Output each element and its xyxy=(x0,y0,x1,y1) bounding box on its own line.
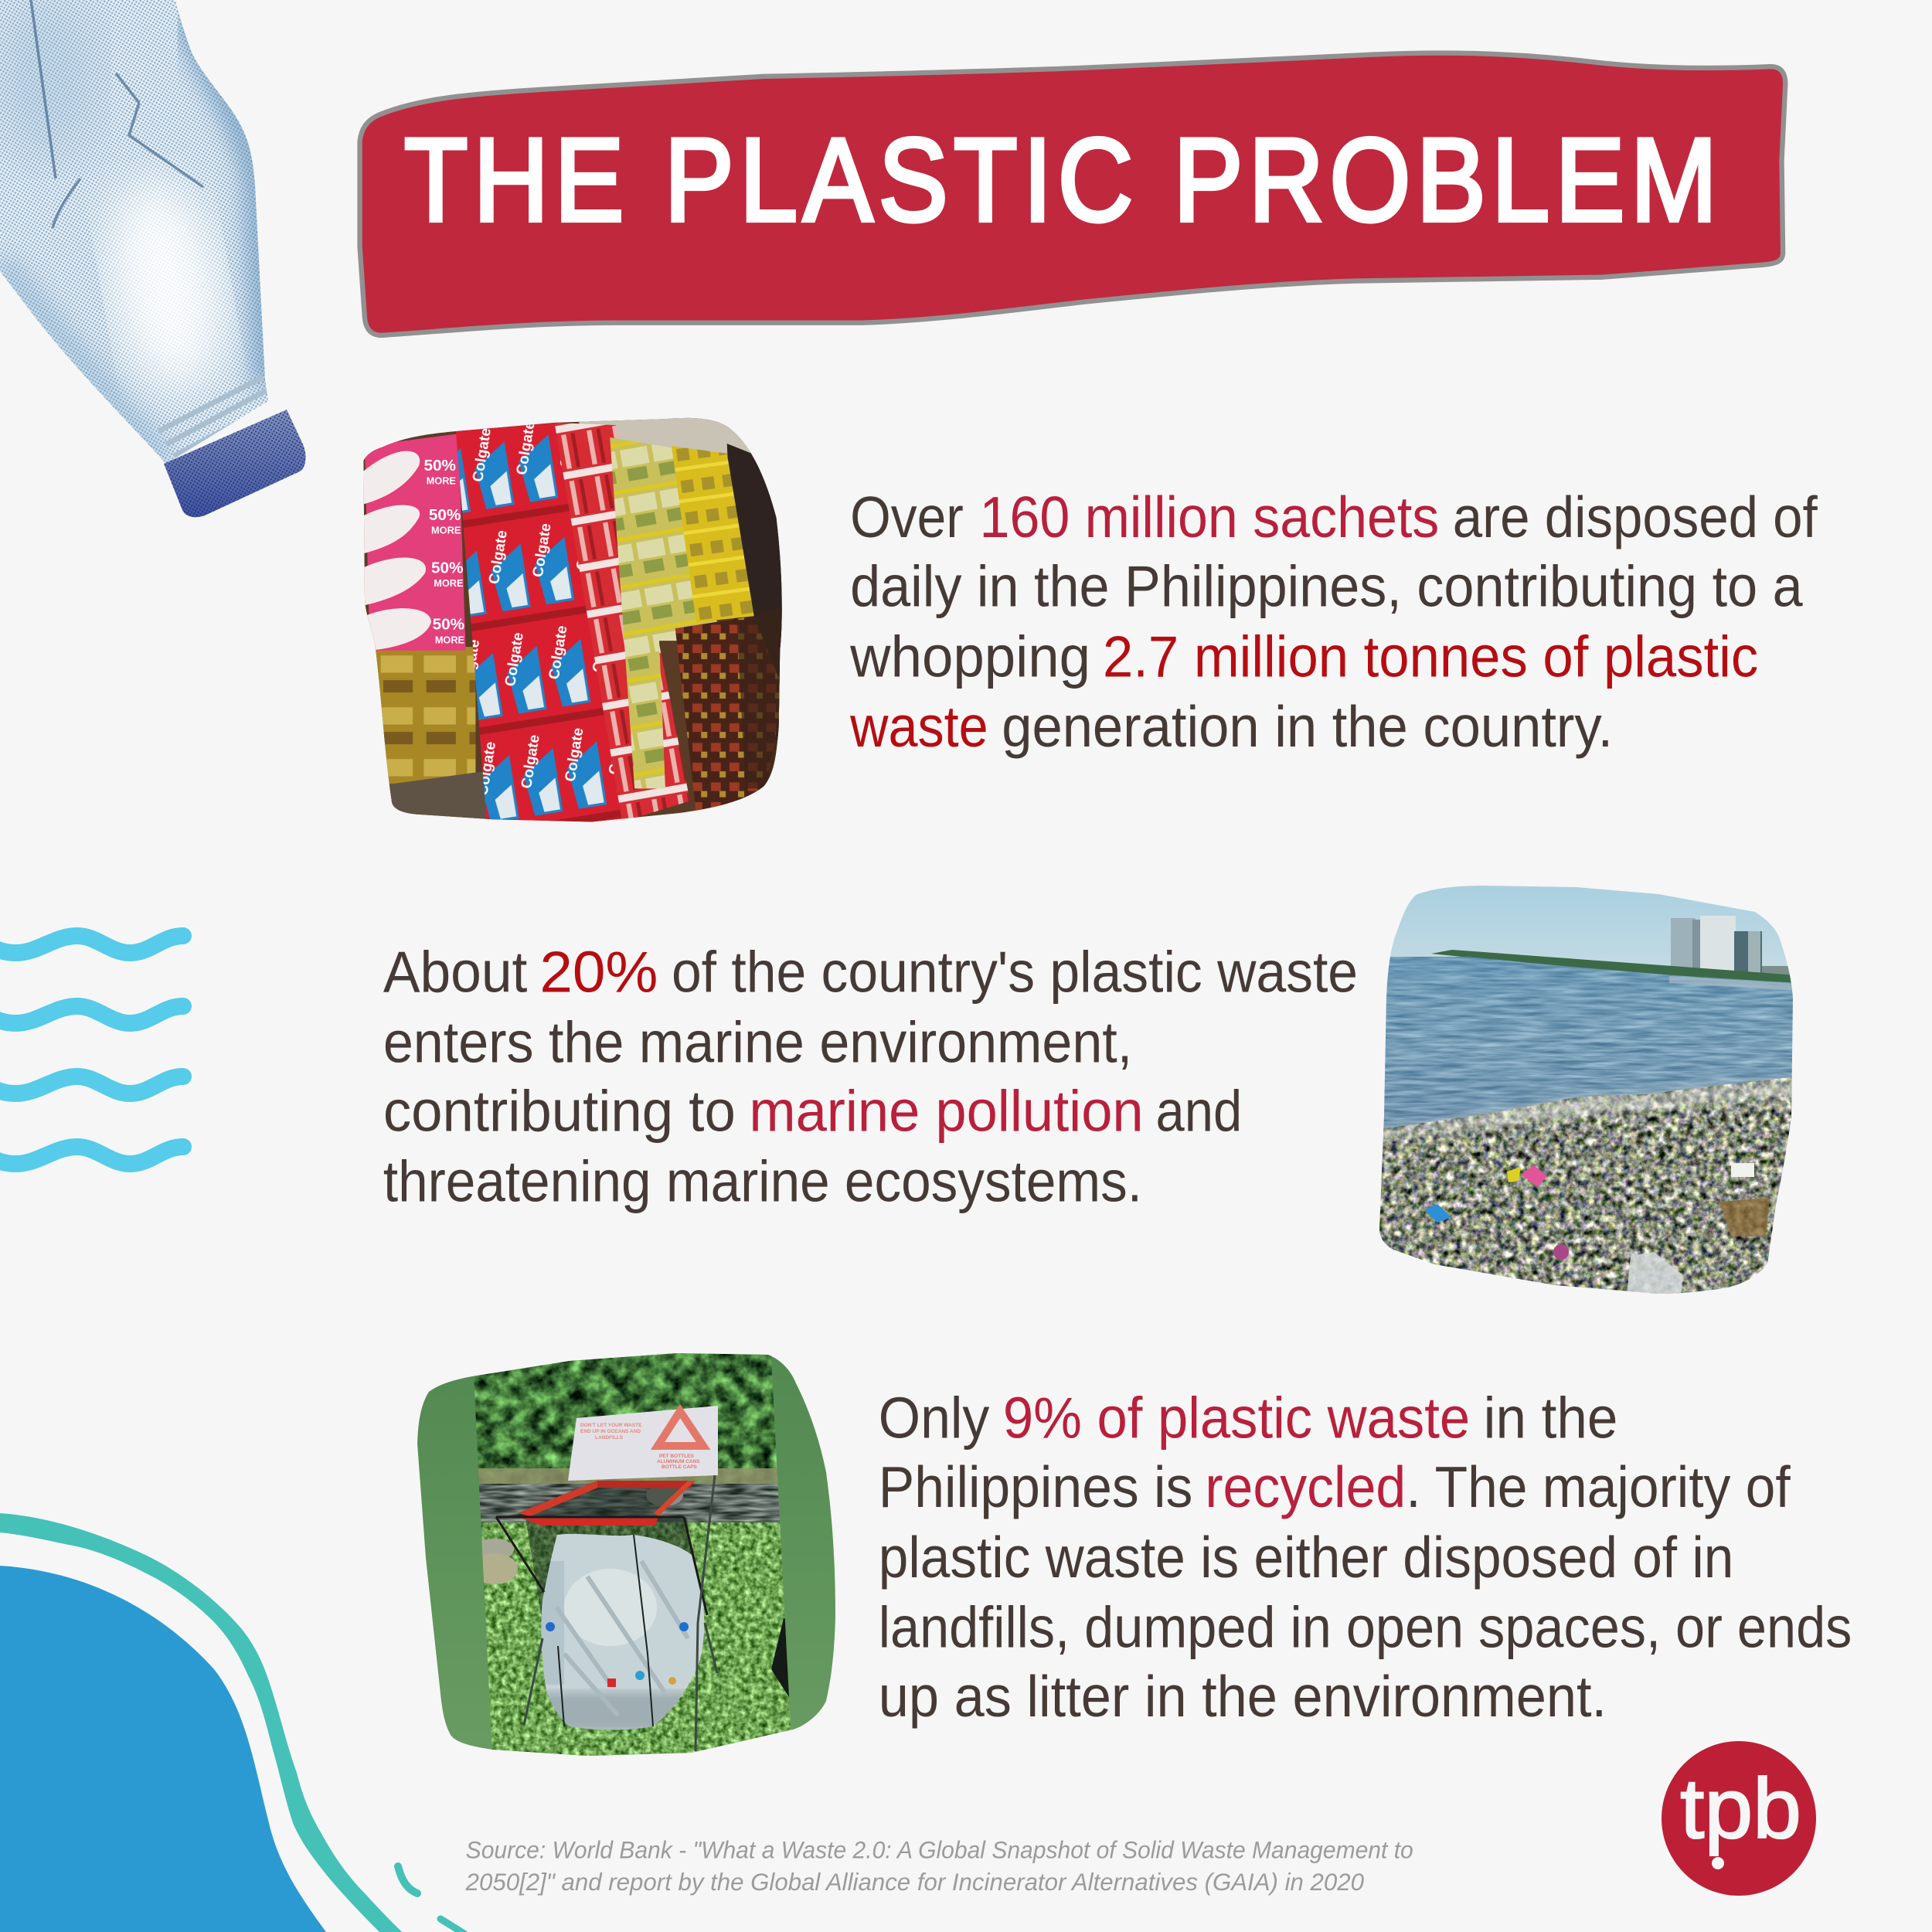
title text: THE PLASTIC PROBLEM xyxy=(404,113,1717,246)
photo: sachets at a store: 50% xyxy=(431,559,464,577)
photo: sachets at a store xyxy=(357,413,788,825)
text: recycling: 9% of plastic waste xyxy=(1003,1386,1470,1451)
litter colour accents xyxy=(1424,1163,1770,1294)
sign board: END UP IN OCEANS AND xyxy=(580,1429,641,1434)
logo: tpb xyxy=(1662,1741,1816,1896)
photo: sachets at a store: MORE xyxy=(431,524,461,536)
text: sachets: daily in the Philippines, contributing to a xyxy=(850,553,1803,618)
text: recycling: recycled xyxy=(1205,1454,1406,1519)
text: sachets: are disposed of xyxy=(1453,485,1818,549)
text: recycling xyxy=(879,1386,1852,1729)
text: recycling: landfills, dumped in open spaces, or ends xyxy=(879,1595,1852,1660)
sign board xyxy=(568,1406,718,1481)
text: recycling: in the xyxy=(1484,1386,1617,1451)
text: marine environment: contributing to xyxy=(383,1079,736,1144)
text: marine environment: of the country's plastic waste xyxy=(672,939,1358,1004)
text: marine environment: 20% xyxy=(539,939,658,1004)
sign board: PET BOTTLES xyxy=(659,1454,694,1459)
text: marine environment: About xyxy=(383,939,528,1004)
illustration: crushed plastic bottle xyxy=(0,0,305,517)
photo: sachets at a store: MORE xyxy=(435,634,464,645)
decoration: blue wave corner xyxy=(0,1566,326,1932)
photo: sachets at a store: MORE xyxy=(434,577,463,589)
sign board: LANDFILLS xyxy=(595,1435,624,1440)
photo: sachets at a store: 50% xyxy=(423,457,456,474)
text: sachets: Over xyxy=(850,485,964,549)
source note: Source: World Bank - "What a Waste 2.0: A Global Snapshot of Solid Waste Management to xyxy=(466,1835,1413,1863)
text: marine environment: threatening marine ecosystems. xyxy=(383,1149,1142,1214)
text: marine environment xyxy=(383,939,1358,1214)
city buildings xyxy=(1671,916,1797,980)
photo: littered shoreline xyxy=(1376,881,1797,1298)
text: sachets: 2.7 million tonnes of plastic xyxy=(1103,624,1758,689)
recycling bag with frame xyxy=(496,1475,717,1751)
text: sachets xyxy=(849,485,1818,759)
sign board: ALUMINUM CANS xyxy=(657,1459,700,1464)
banner shape xyxy=(360,53,1785,335)
photo: recycling bin in green frame xyxy=(410,1345,842,1762)
title banner xyxy=(360,53,1785,335)
text: sachets: generation in the country. xyxy=(1002,694,1613,759)
text: recycling: . The majority of xyxy=(1406,1454,1791,1519)
sign board: DON'T LET YOUR WASTE xyxy=(580,1423,642,1428)
decoration: blue waves xyxy=(0,936,183,1164)
logo: tpb: tpb xyxy=(1680,1761,1801,1856)
text: recycling: up as litter in the environment. xyxy=(879,1664,1607,1729)
photo: sachets at a store: 50% xyxy=(433,616,464,634)
photo: sachets at a store: 50% xyxy=(429,506,461,524)
text: recycling: plastic waste is either disposed of in xyxy=(879,1525,1733,1590)
photo: sachets at a store: MORE xyxy=(427,475,456,487)
text: marine environment: and xyxy=(1156,1079,1242,1144)
source note: 2050[2]" and report by the Global Alliance for Incinerator Alternatives (GAIA) in 2020 xyxy=(465,1868,1364,1896)
text: recycling: Only xyxy=(879,1386,990,1451)
sign board: BOTTLE CAPS xyxy=(662,1464,698,1470)
text: recycling: Philippines is xyxy=(879,1454,1192,1519)
text: sachets: whopping xyxy=(849,624,1090,689)
text: marine environment: marine pollution xyxy=(749,1079,1144,1144)
text: marine environment: enters the marine environment, xyxy=(383,1009,1132,1074)
text: sachets: waste xyxy=(849,694,988,759)
source note xyxy=(465,1835,1413,1896)
text: sachets: 160 million sachets xyxy=(980,485,1439,549)
decoration: teal curve xyxy=(0,1513,465,1932)
